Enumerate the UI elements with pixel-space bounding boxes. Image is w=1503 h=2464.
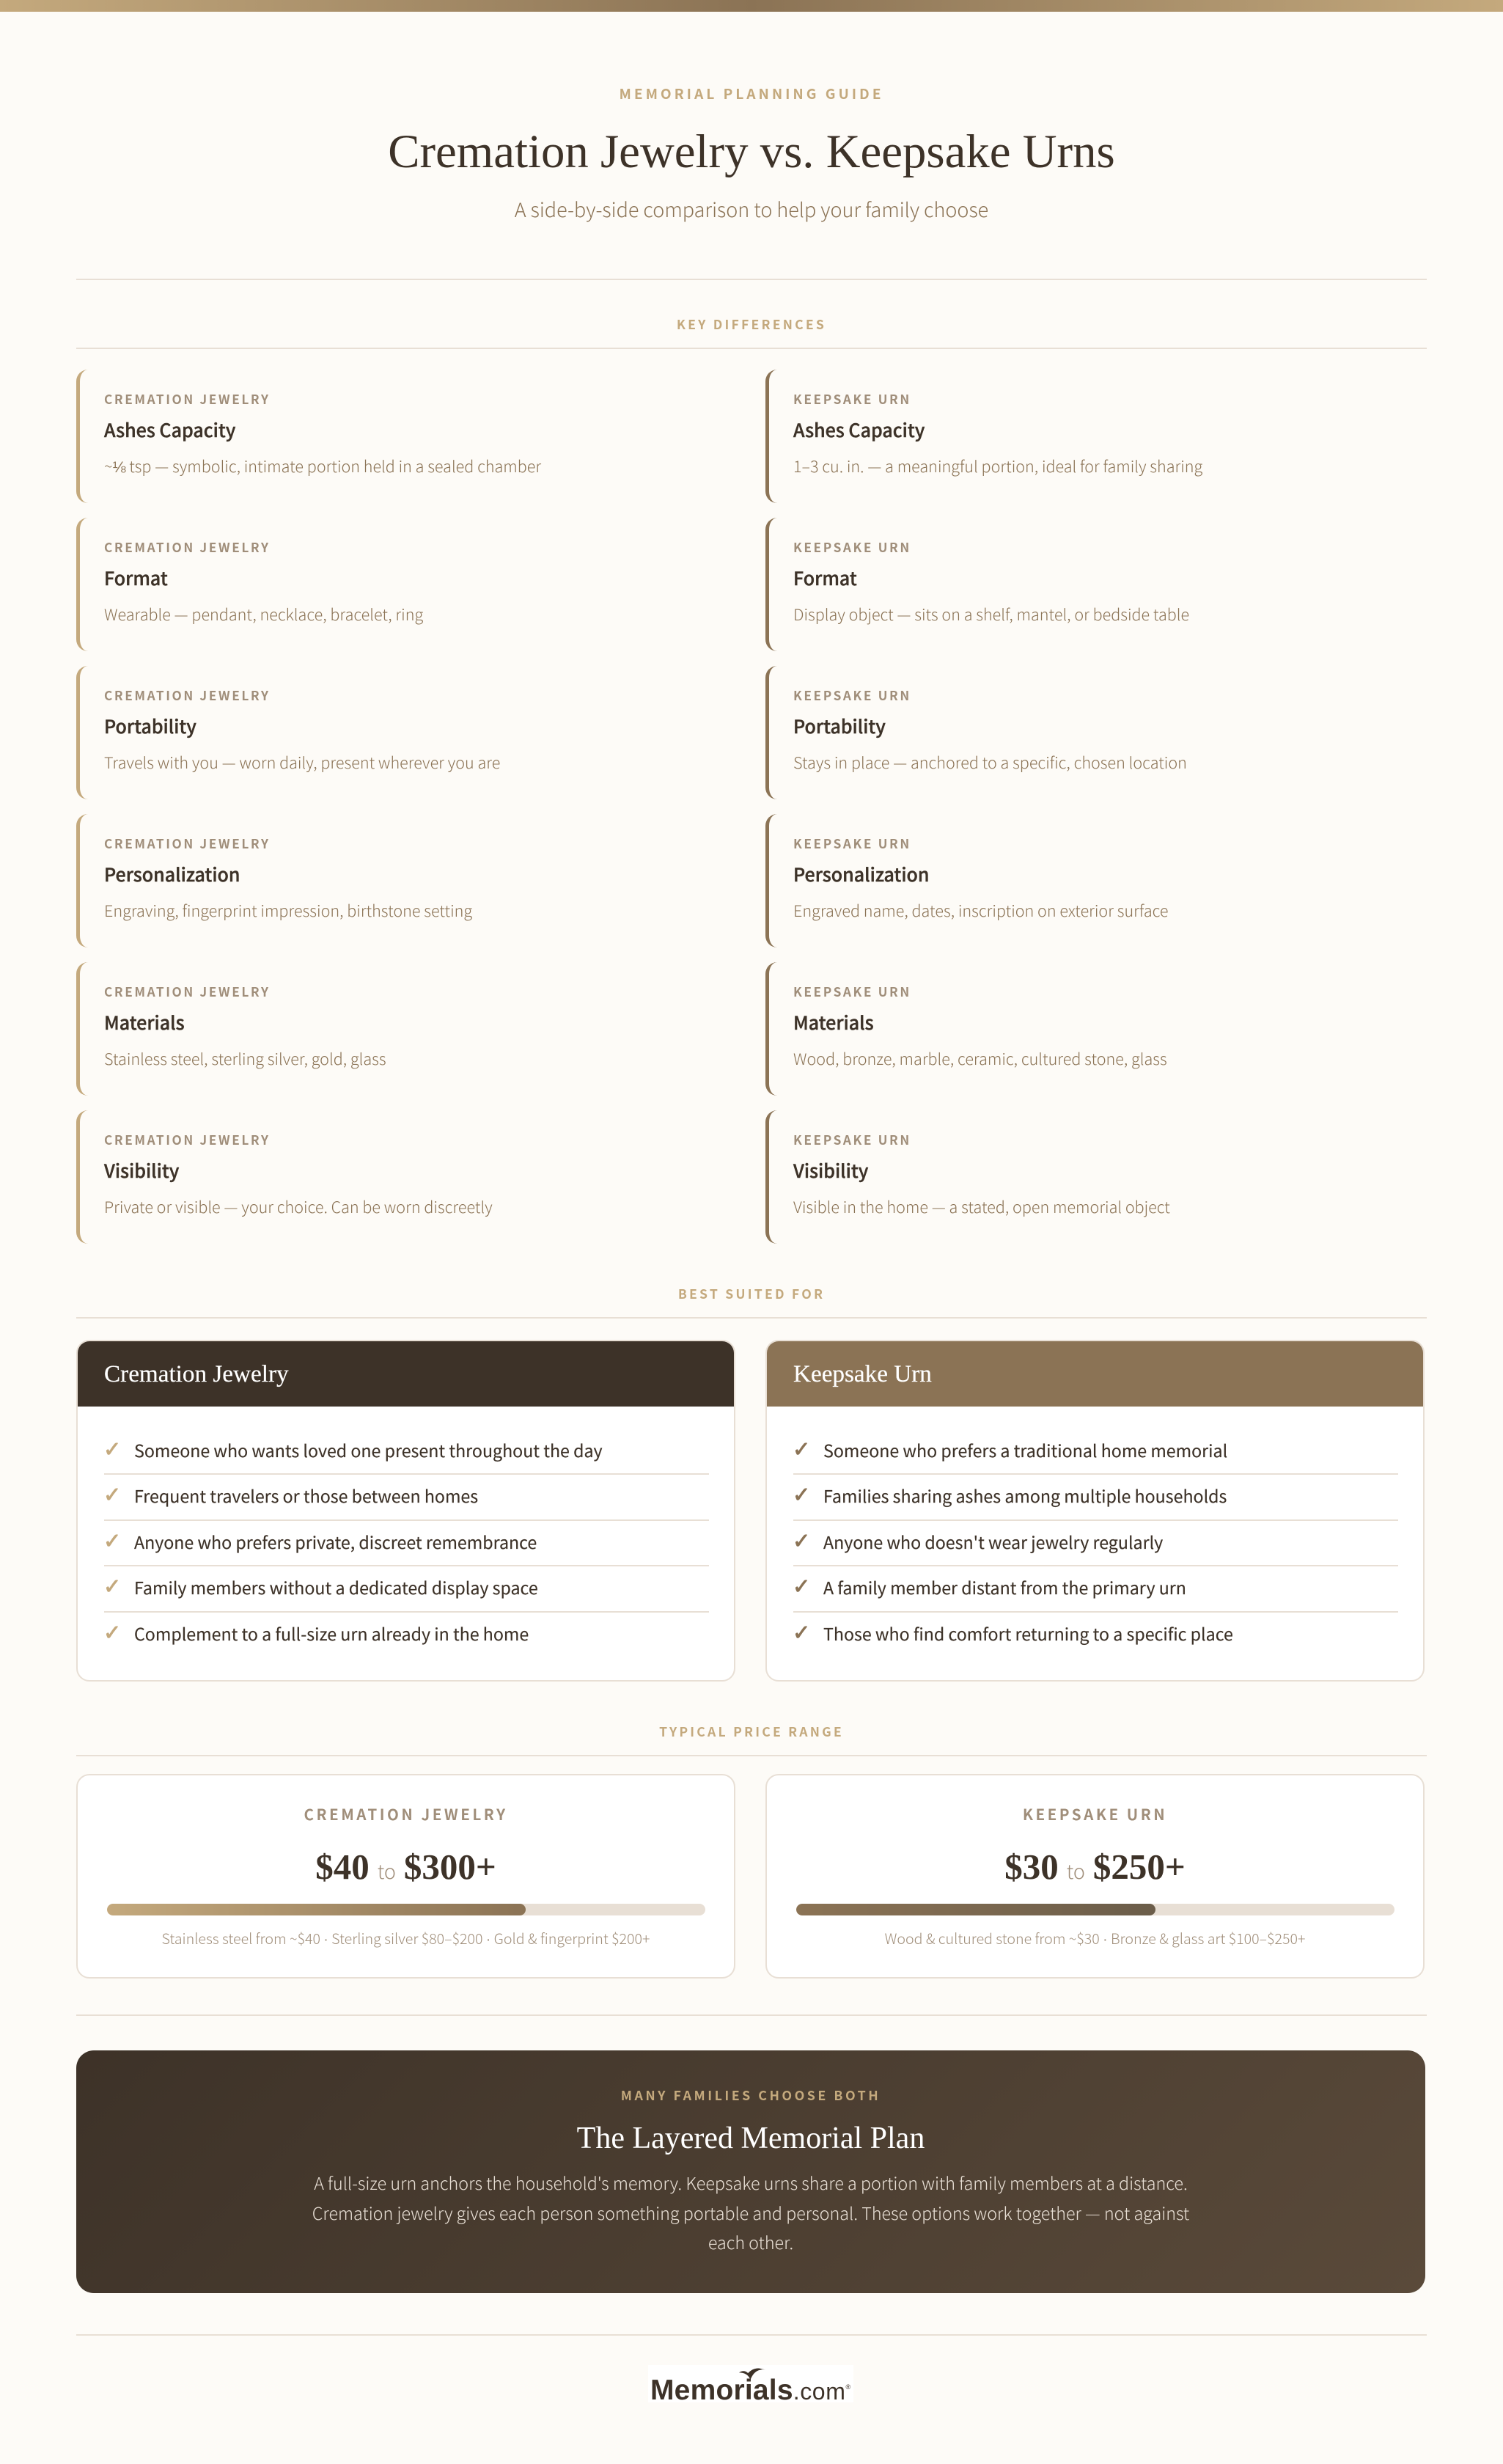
list item: Frequent travelers or those between homes (134, 1483, 478, 1508)
row: urn portability: KEEPSAKE URN (793, 686, 911, 704)
row: jewelry visibility: Private or visible — your choice. Can be worn discreetly (104, 1195, 493, 1218)
row: urn visibility (765, 1110, 1427, 1244)
list item: ✓ (793, 1482, 810, 1507)
list item: Someone who prefers a traditional home memorial (823, 1437, 1227, 1462)
price range: $40 to$300+ (315, 1847, 496, 1887)
row: urn personalization: KEEPSAKE URN (793, 834, 911, 852)
list item: ✓ (103, 1482, 121, 1507)
price note: Stainless steel from ~$40 · Sterling silver $80–$200 · Gold & fingerprint $200+ (162, 1927, 650, 1948)
section label: best suited for: BEST SUITED FOR (678, 1285, 825, 1303)
panel: price keepsake urn (765, 1774, 1425, 1979)
panel: best suited cremation jewelry (76, 1340, 735, 1682)
card header: Cremation Jewelry (104, 1360, 289, 1387)
row: urn format (765, 518, 1427, 651)
row: urn visibility: KEEPSAKE URN (793, 1130, 911, 1148)
row: urn format: KEEPSAKE URN (793, 538, 911, 556)
row: jewelry portability (76, 666, 738, 799)
row: jewelry portability: CREMATION JEWELRY (104, 686, 271, 704)
row: urn visibility: Visible in the home — a stated, open memorial object (793, 1195, 1170, 1218)
list item: Anyone who prefers private, discreet remembrance (134, 1529, 537, 1554)
price label: CREMATION JEWELRY (304, 1803, 508, 1825)
row: urn personalization (765, 814, 1427, 947)
list item: Complement to a full-size urn already in the home (134, 1621, 529, 1646)
row: urn materials (765, 962, 1427, 1096)
callout eyebrow: MANY FAMILIES CHOOSE BOTH (621, 2086, 881, 2105)
list item: ✓ (103, 1620, 121, 1645)
row: urn ashes capacity: KEEPSAKE URN (793, 389, 911, 408)
panel: best suited keepsake urn (765, 1340, 1425, 1682)
eyebrow: MEMORIAL PLANNING GUIDE (620, 83, 883, 103)
price range: $30 to$250+ (1004, 1847, 1186, 1887)
row: jewelry personalization: Personalization (104, 861, 240, 887)
panel: price cremation jewelry (76, 1774, 735, 1979)
row: urn materials: KEEPSAKE URN (793, 982, 911, 1000)
row: urn portability (765, 666, 1427, 799)
section label: key differences: KEY DIFFERENCES (677, 315, 826, 334)
list item: A family member distant from the primary urn (823, 1574, 1186, 1599)
row: jewelry visibility (76, 1110, 738, 1244)
row: urn personalization: Personalization (793, 861, 930, 887)
list item: ✓ (793, 1574, 810, 1599)
row: urn personalization: Engraved name, dates, inscription on exterior surface (793, 899, 1169, 922)
row: jewelry portability: Portability (104, 713, 196, 739)
panel: key differences comparison grid (76, 370, 1202, 1244)
row: jewelry format (76, 518, 738, 651)
list item: ✓ (103, 1437, 121, 1462)
row: jewelry ashes capacity: CREMATION JEWELRY (104, 389, 271, 408)
row: jewelry portability: Travels with you — worn daily, present wherever you are (104, 751, 500, 774)
row: jewelry visibility: Visibility (104, 1157, 179, 1184)
list item: ✓ (103, 1574, 121, 1599)
row: urn materials: Materials (793, 1009, 874, 1035)
row: urn portability: Stays in place — anchored to a specific, chosen location (793, 751, 1187, 774)
row: jewelry format: Format (104, 565, 168, 591)
logo: Memorials.com (648, 2365, 853, 2402)
row: jewelry materials: CREMATION JEWELRY (104, 982, 271, 1000)
list item: ✓ (793, 1620, 810, 1645)
callout body (312, 2170, 1189, 2254)
icon: bird (739, 2369, 765, 2379)
list item: Families sharing ashes among multiple households (823, 1483, 1227, 1508)
row: urn materials: Wood, bronze, marble, ceramic, cultured stone, glass (793, 1047, 1167, 1070)
title: Cremation Jewelry vs. Keepsake Urns (388, 125, 1115, 178)
row: jewelry format: Wearable — pendant, necklace, bracelet, ring (104, 603, 423, 626)
wordmark: Memorials.com® (650, 2375, 850, 2406)
row: jewelry personalization: CREMATION JEWELRY (104, 834, 271, 852)
top gradient bar (0, 0, 1503, 12)
row: jewelry ashes capacity: Ashes Capacity (104, 417, 235, 443)
row: urn portability: Portability (793, 713, 886, 739)
row: urn format: Display object — sits on a shelf, mantel, or bedside table (793, 603, 1189, 626)
list item: ✓ (793, 1528, 810, 1553)
list item: Anyone who doesn't wear jewelry regularly (823, 1529, 1163, 1554)
row: urn ashes capacity: 1–3 cu. in. — a meaningful portion, ideal for family sharing (793, 455, 1202, 477)
callout title: The Layered Memorial Plan (577, 2122, 925, 2155)
subtitle: A side-by-side comparison to help your family choose (515, 194, 988, 223)
header (388, 83, 1115, 223)
row: jewelry personalization (76, 814, 738, 947)
row: urn format: Format (793, 565, 857, 591)
section label: typical price range: TYPICAL PRICE RANGE (659, 1723, 844, 1741)
list item: ✓ (103, 1528, 121, 1553)
callout body: A full-size urn anchors the household's memory. Keepsake urns share a portion with family members at a distance. (314, 2170, 1188, 2195)
callout body: Cremation jewelry gives each person something portable and personal. These options work together — not against (312, 2200, 1189, 2225)
card header (767, 1341, 1423, 1407)
price note: Wood & cultured stone from ~$30 · Bronze & glass art $100–$250+ (885, 1927, 1305, 1948)
callout body: each other. (708, 2229, 793, 2254)
row: jewelry format: CREMATION JEWELRY (104, 538, 271, 556)
list item: Family members without a dedicated display space (134, 1574, 538, 1599)
row: urn ashes capacity: Ashes Capacity (793, 417, 925, 443)
row: urn visibility: Visibility (793, 1157, 868, 1184)
row: jewelry ashes capacity (76, 370, 738, 503)
row: jewelry materials: Stainless steel, sterling silver, gold, glass (104, 1047, 386, 1070)
row: jewelry visibility: CREMATION JEWELRY (104, 1130, 271, 1148)
row: jewelry materials (76, 962, 738, 1096)
callout: layered memorial plan (76, 2050, 1425, 2293)
row: jewelry personalization: Engraving, fingerprint impression, birthstone setting (104, 899, 472, 922)
price label: KEEPSAKE URN (1023, 1803, 1167, 1825)
list item: Those who find comfort returning to a specific place (823, 1621, 1233, 1646)
list item: ✓ (793, 1437, 810, 1462)
card header (78, 1341, 734, 1407)
list item: Someone who wants loved one present throughout the day (134, 1437, 603, 1462)
row: jewelry ashes capacity: ~⅛ tsp — symbolic, intimate portion held in a sealed chamber (104, 455, 541, 477)
price bar (107, 1904, 705, 1915)
price bar (796, 1904, 1394, 1915)
row: urn ashes capacity (765, 370, 1427, 503)
row: jewelry materials: Materials (104, 1009, 185, 1035)
card header: Keepsake Urn (793, 1360, 932, 1387)
